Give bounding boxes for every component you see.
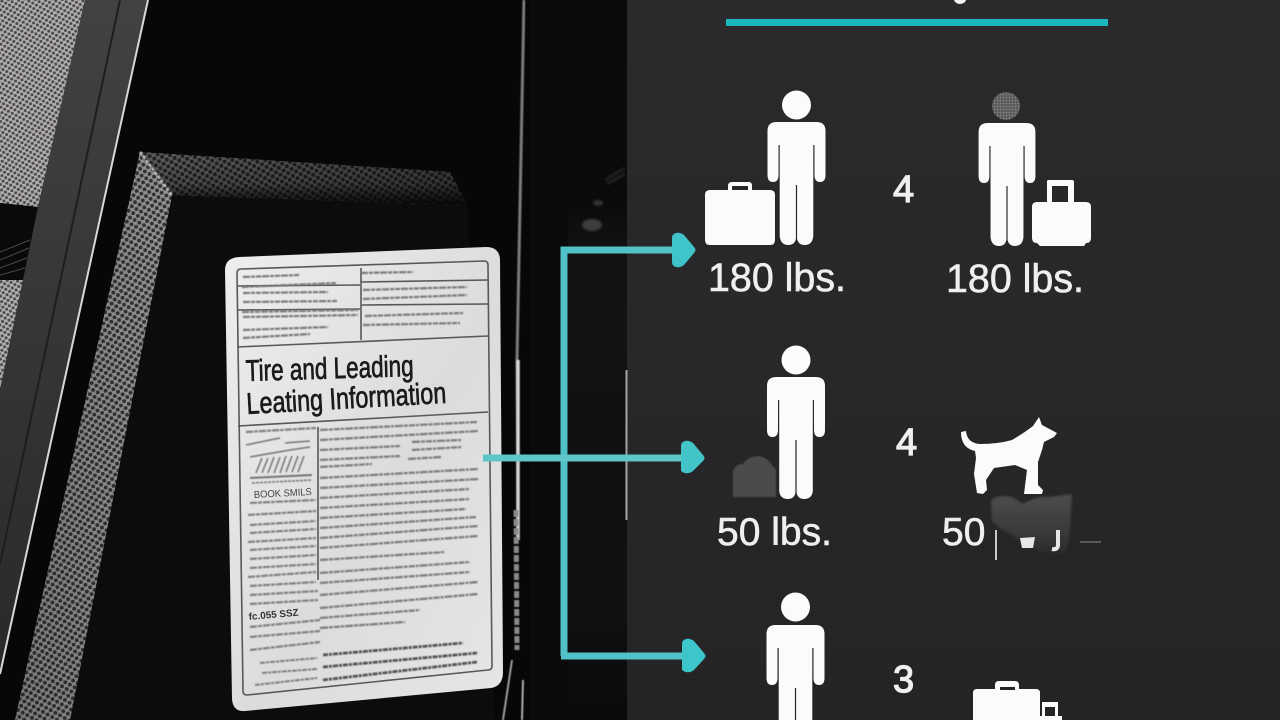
sticker right column fine print [320,422,479,628]
seat gap with slats [0,203,38,280]
sticker left column fine print [246,428,320,650]
door panel inner [70,195,495,720]
row 2 left weight: 50 lbs. [717,511,832,554]
photo background: door jamb [0,0,627,720]
row 1 left weight: 180 lbs. [708,256,846,300]
icon: person [768,90,826,245]
row 2 left: person with faded bag [733,346,825,499]
sticker small code: fc.055 SSZ [248,608,299,623]
row 2 right weight, partly smudged: 50 [942,511,985,554]
sticker tire diagram [246,438,312,483]
white pillar trim line [0,0,148,674]
sticker top section fine print [242,272,467,338]
mesh bolster side [15,152,172,720]
icon: rolling suitcase [1032,180,1091,246]
row 1 count: 4 [893,169,914,211]
icon: briefcase [973,681,1040,720]
row 1 right weight: 180 lbs. [946,257,1084,301]
door seal vertical lines [503,0,524,720]
icon: person [767,346,825,499]
sticker subheading: BOOK SMILS [254,487,312,501]
row 3 left: person [766,592,824,720]
sticker frame and dividers [237,261,492,695]
row 3 right: briefcase with small roller [973,681,1062,720]
row 2 count: 4 [896,422,917,464]
arrow to row 3 [561,639,706,672]
door seal line on panel edge [626,370,628,520]
icon: small rolling suitcase [1036,702,1062,720]
sticker title: Leating Information [246,377,447,421]
icon: dog [961,417,1057,494]
icon: faded bag [733,456,776,497]
icon: person with dotted head [979,92,1035,246]
door latch highlights [582,168,625,231]
row 1 left: person with briefcase [705,90,826,245]
arrow to row 1 [564,233,696,656]
right dark panel [627,0,1280,720]
mesh bolster top [140,152,467,205]
sticker card [225,247,503,711]
seat mesh upper left [0,0,85,207]
sticker: tire and loading information [225,247,503,711]
arrow to row 2 [483,441,704,473]
cropped heading fragment [954,0,966,4]
row 3 count: 3 [893,659,914,701]
icon: briefcase [705,182,775,245]
sticker title: Tire and Leading [245,350,414,388]
row 1 right: person with rolling suitcase [979,92,1091,246]
heading underline [726,19,1108,26]
sticker title [245,350,447,421]
sticker bottom table rows [255,643,477,685]
pillar groove [0,0,120,564]
smudged artifact over right weight [991,494,1101,560]
door pillar band [0,0,148,672]
seat mesh lower left [0,280,23,390]
teal connector: vertical trunk and three arrows [483,233,706,672]
